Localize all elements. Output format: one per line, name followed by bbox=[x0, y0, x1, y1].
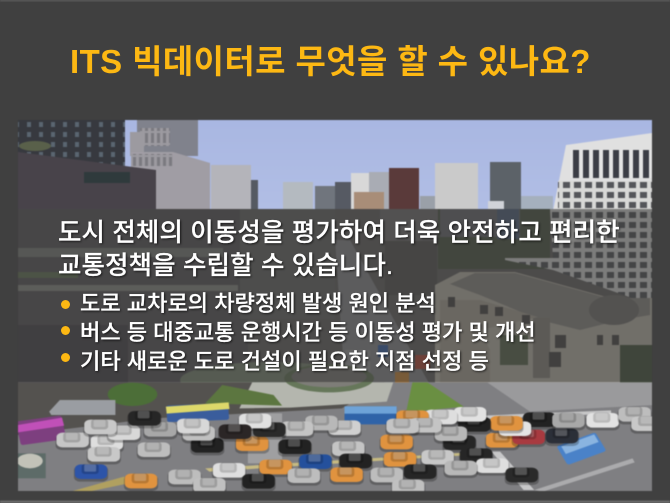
cars bbox=[56, 407, 665, 497]
lower city block bbox=[18, 209, 652, 398]
headline text: 교통정책을 수립할 수 있습니다. bbox=[58, 252, 393, 280]
headline text: 도시 전체의 이동성을 평가하여 더욱 안전하고 편리한 bbox=[58, 219, 620, 247]
title: ITS 빅데이터로 무엇을 할 수 있나요? bbox=[70, 43, 591, 80]
right building bbox=[553, 133, 652, 212]
bullet 2: 버스 등 대중교통 운행시간 등 이동성 평가 및 개선 bbox=[80, 320, 536, 345]
buses bbox=[16, 402, 606, 478]
bullet 3: 기타 새로운 도로 건설이 필요한 지점 선정 등 bbox=[80, 349, 489, 374]
road and plaza bbox=[16, 364, 665, 497]
bullet 1: 도로 교차로의 차량정체 발생 원인 분석 bbox=[80, 291, 436, 316]
bullet list bbox=[61, 291, 536, 374]
left buildings bbox=[18, 120, 210, 211]
headline text bbox=[58, 219, 621, 280]
distant skyline bbox=[211, 162, 553, 212]
frame lines bbox=[0, 0, 670, 2]
dark overlay band bbox=[18, 209, 652, 382]
